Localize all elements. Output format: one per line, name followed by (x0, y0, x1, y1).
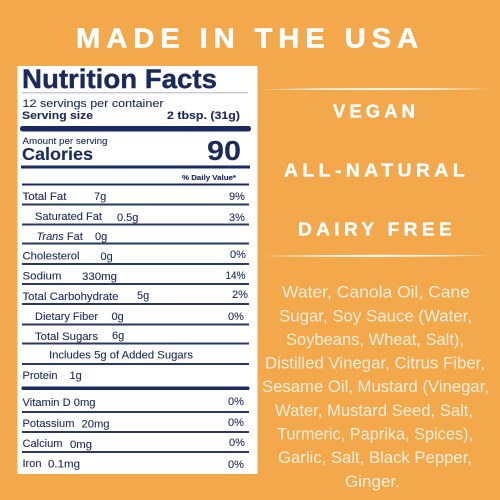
ingredients text: Ginger. (345, 473, 400, 491)
ingredients text: Garlic, Salt, Black Pepper, (278, 449, 472, 467)
row: potassium: Potassium (22, 418, 74, 430)
daily value header: % Daily Value* (182, 175, 236, 182)
row: calcium: 0% (229, 437, 245, 449)
row: dietary fiber: 0% (228, 311, 244, 323)
badge: all-natural: ALL-NATURAL (284, 160, 469, 180)
row: protein (22, 370, 82, 382)
row: iron: 0.1mg (48, 458, 80, 470)
row: protein: 1g (70, 370, 82, 382)
row: total fat: Total Fat (22, 191, 66, 203)
row: cholesterol (22, 249, 246, 263)
row: protein: Protein (22, 370, 58, 382)
row: total carbohydrate: 2% (232, 289, 248, 301)
row: potassium (22, 417, 244, 430)
row: vitamin D: 0% (228, 396, 244, 408)
row: saturated fat: 3% (229, 212, 245, 224)
badge: dairy free: DAIRY FREE (298, 220, 456, 240)
calories: Amount per serving (22, 136, 107, 146)
row: total carbohydrate: Total Carbohydrate (22, 291, 118, 303)
row: iron: Iron (22, 458, 42, 470)
ingredients text: Distilled Vinegar, Citrus Fiber, (265, 354, 485, 372)
row: dietary fiber (35, 311, 244, 323)
row: iron (22, 458, 244, 471)
panel: nutrition facts label (18, 64, 258, 474)
row: vitamin D: Vitamin D 0mg (22, 397, 96, 409)
ingredients text: Soybeans, Wheat, Salt), (286, 331, 464, 349)
row: cholesterol: 0% (230, 249, 246, 261)
row: trans fat (36, 231, 107, 243)
row: sodium: 330mg (82, 271, 117, 283)
ingredients text (262, 284, 489, 491)
row: total fat: 7g (94, 191, 106, 203)
row: sodium: 14% (226, 270, 246, 282)
row: cholesterol: 0g (100, 251, 113, 263)
row: dietary fiber: 0g (112, 311, 124, 323)
row: total sugars: 6g (112, 330, 124, 342)
ingredients text: Turmeric, Paprika, Spices), (277, 426, 473, 444)
ingredients text: Water, Canola Oil, Cane (282, 284, 470, 302)
row: saturated fat (35, 211, 245, 224)
row: total fat: 9% (229, 191, 245, 203)
row: calcium: Calcium (22, 438, 62, 450)
heading: Nutrition Facts: Nutrition Facts (22, 64, 217, 94)
row: potassium: 0% (228, 417, 244, 429)
calories: Calories (22, 144, 93, 164)
row: calcium (22, 437, 245, 451)
title: MADE IN THE USA (76, 22, 424, 54)
ingredients text: Water, Mustard Seed, Salt, (275, 402, 473, 420)
servings info: 12 servings per container (22, 98, 164, 110)
row: sodium: Sodium (22, 270, 62, 282)
row: vitamin D (22, 396, 244, 409)
row: total sugars (35, 330, 124, 343)
row: calcium: 0mg (70, 439, 92, 451)
calories (22, 135, 241, 166)
ingredients text: Sugar, Soy Sauce (Water, (279, 308, 472, 326)
row: total carbohydrate (22, 289, 248, 303)
row: trans fat: Trans Fat (36, 231, 83, 243)
ingredients text: Sesame Oil, Mustard (Vinegar, (262, 378, 489, 396)
row: saturated fat: Saturated Fat (35, 211, 102, 223)
servings info: 2 tbsp. (31g) (167, 110, 240, 122)
row: saturated fat: 0.5g (117, 212, 138, 224)
row: total sugars: Total Sugars (35, 331, 99, 343)
row: sodium (22, 270, 246, 283)
row: trans fat: 0g (95, 231, 107, 243)
row: total fat (22, 191, 245, 203)
row: potassium: 20mg (82, 418, 110, 430)
calories: 90 (207, 135, 241, 166)
row: cholesterol: Cholesterol (22, 250, 80, 262)
row: total carbohydrate: 5g (137, 290, 149, 302)
row: iron: 0% (228, 459, 244, 471)
row: dietary fiber: Dietary Fiber (35, 311, 98, 323)
servings info (22, 98, 240, 122)
servings info: Serving size (22, 110, 93, 122)
badge: vegan: VEGAN (333, 102, 419, 122)
row: added sugars: Includes 5g of Added Sugars (49, 350, 193, 362)
